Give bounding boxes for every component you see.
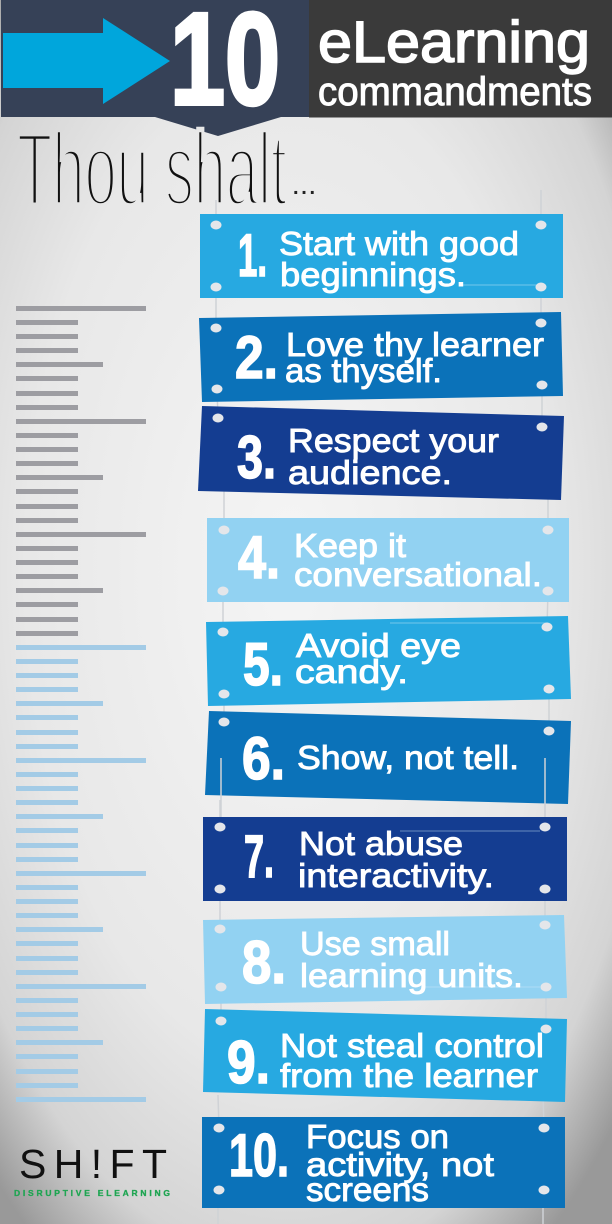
banner 4: 4. (238, 524, 280, 591)
heading: Thou shalt (17, 112, 315, 228)
hanging strings (216, 190, 549, 1224)
banner 5 (206, 616, 571, 706)
icon: arrow (3, 18, 170, 104)
banner 9: 9. (227, 1029, 270, 1096)
banner 10: screens (306, 1171, 429, 1208)
banner 3: Respect your (288, 422, 499, 459)
banner 2: as thyself. (285, 352, 442, 389)
header panel: dark grey (309, 0, 612, 118)
banner 8: Use small (300, 925, 450, 962)
blue bars (16, 645, 146, 1102)
banner 7 (203, 817, 567, 901)
banner 6: 6. (242, 725, 285, 792)
logo: SHIFT: SH!FT (19, 1141, 167, 1187)
banner 8 (203, 915, 567, 1004)
banner 3: 3. (237, 424, 276, 491)
banner 10: Focus on (306, 1118, 449, 1155)
logo: SHIFT: DISRUPTIVE ELEARNING (14, 1188, 170, 1198)
heading: eLearning: eLearning (318, 10, 590, 75)
banner 1: Start with good (279, 225, 519, 262)
banner 6 (205, 711, 571, 826)
banner 3 (198, 406, 564, 500)
banner 4 (207, 518, 569, 602)
banner 2 (199, 312, 563, 402)
banner 3: audience. (288, 454, 452, 491)
banner 9: Not steal control (280, 1027, 544, 1064)
banner 9: from the learner (280, 1057, 538, 1094)
banner 7: interactivity. (298, 857, 494, 894)
banner 10: 10. (229, 1122, 289, 1189)
banner 8: 8. (242, 929, 286, 996)
banner 8: learning units. (300, 957, 523, 994)
heading: Thou shalt: ... (293, 177, 315, 199)
banner 4: Keep it (294, 527, 406, 564)
banner 6: Show, not tell. (297, 739, 519, 776)
banner 2: 2. (235, 324, 278, 391)
banner 4: conversational. (294, 556, 542, 593)
heading: Thou shalt: Thou shalt (17, 112, 287, 228)
banner 7: Not abuse (299, 825, 463, 862)
banner 2: Love thy learner (286, 326, 544, 363)
banner 5: 5. (243, 631, 283, 698)
header panel: navy (1, 0, 309, 136)
banner 9 (203, 1009, 567, 1102)
grey bars (16, 306, 146, 636)
banner 10: activity, not (306, 1146, 494, 1183)
header (1, 0, 612, 136)
heading: commandments: commandments (318, 70, 592, 114)
banner 7: 7. (244, 823, 274, 890)
banner 1: 1. (238, 222, 267, 289)
banner 5: Avoid eye (296, 627, 461, 664)
banner 10 (202, 1117, 565, 1208)
banner 5: candy. (295, 653, 408, 690)
banner 1 (200, 214, 563, 298)
banner 1: beginnings. (280, 256, 466, 293)
